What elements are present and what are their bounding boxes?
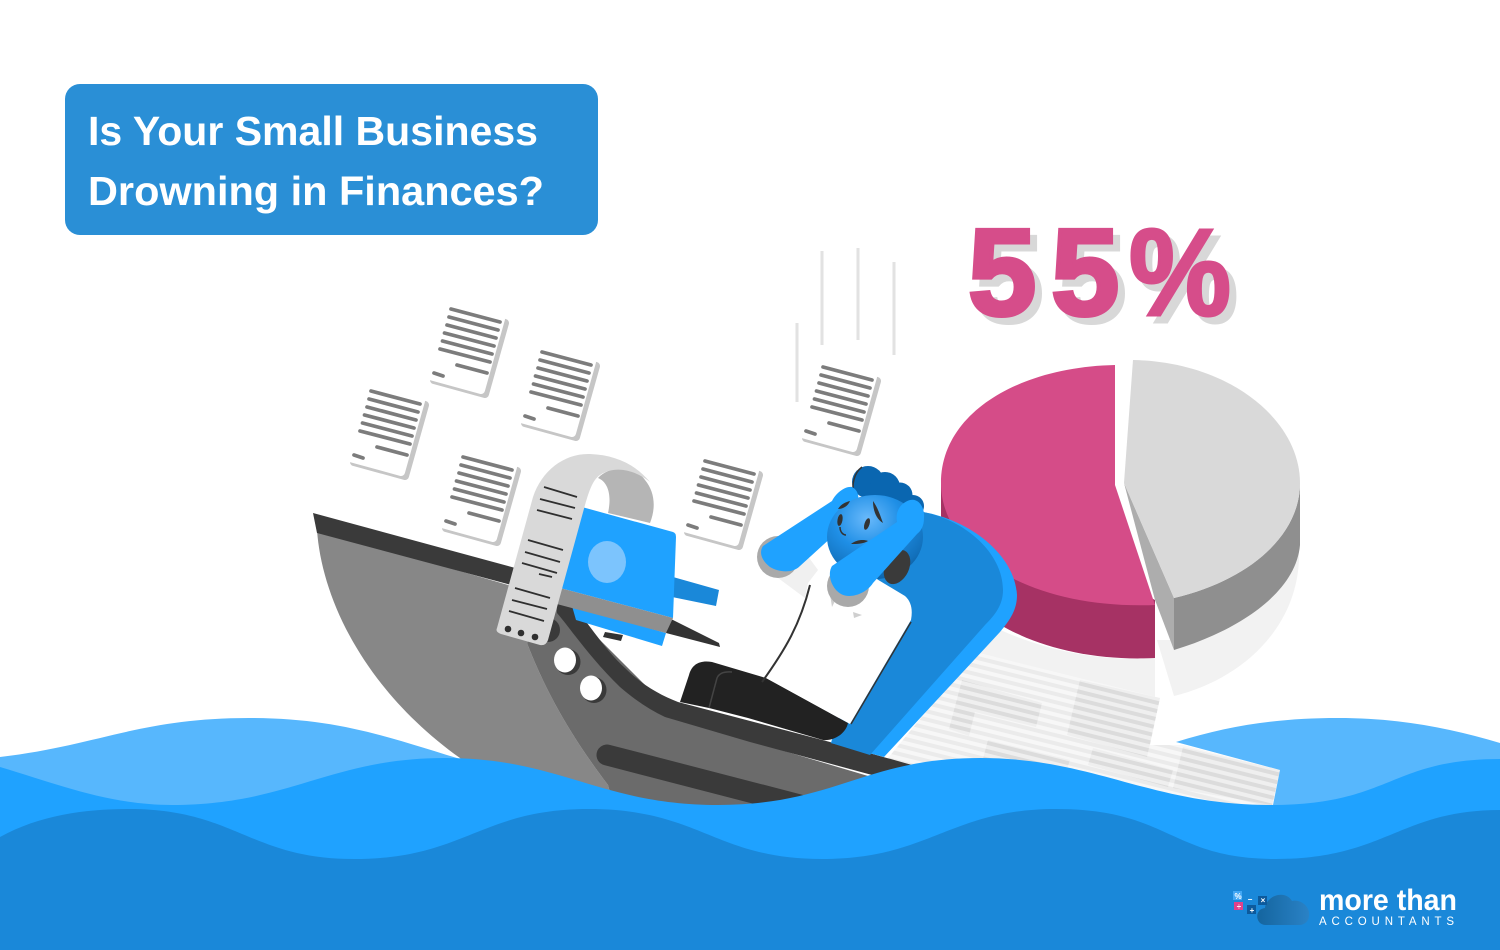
statistic: 55%: 55: [968, 205, 1119, 342]
laptop screen: [560, 507, 676, 618]
hull dark stripe: [607, 755, 800, 805]
pie chart 55 percent: [941, 360, 1300, 658]
receipt paper roll: [496, 454, 654, 645]
document 4: [442, 452, 517, 542]
scattered striped papers: [870, 652, 1280, 815]
statistic: 55%: [968, 205, 1238, 349]
pie shadow on the ground: [975, 540, 1299, 698]
logo: More Than Accountants: [1233, 884, 1457, 928]
laptop hinge bar: [672, 577, 719, 606]
document 5: [684, 456, 759, 546]
statistic: 55%: %: [1129, 205, 1231, 342]
title banner: Drowning in Finances?: [88, 168, 544, 214]
laptop wedge: [666, 618, 720, 647]
face: [836, 501, 883, 544]
hull light side: [317, 530, 620, 830]
laptop lower panel: [572, 606, 666, 646]
logo calculator keys: %: [1234, 892, 1242, 901]
falling motion lines: [797, 248, 894, 402]
title banner: [65, 84, 598, 235]
logo calculator keys: −: [1248, 895, 1253, 904]
statistic: 55%: 55: [975, 212, 1126, 349]
back wave left: [0, 718, 470, 810]
logo wordmark: more than: [1319, 884, 1457, 917]
document 2: [521, 347, 596, 437]
logo calculator keys: +: [1250, 906, 1255, 915]
shirt: [762, 555, 912, 724]
legs: [680, 662, 848, 740]
deck dark band: [557, 603, 912, 775]
hull middle section: [527, 600, 915, 830]
right arm: [827, 500, 924, 607]
hair: [852, 466, 924, 517]
back wave right: [1176, 718, 1500, 810]
front wave: [0, 809, 1500, 950]
chair: [831, 510, 1017, 757]
document 6 falling: [802, 362, 877, 452]
head: [827, 495, 923, 588]
receipt dots: [505, 626, 538, 640]
statistic: 55%: %: [1136, 212, 1238, 349]
sinking boat: [313, 513, 915, 830]
logo calculator keys: ×: [1261, 896, 1266, 905]
left arm: [757, 487, 858, 578]
laptop grey band: [553, 588, 673, 633]
logo calculator keys: ÷: [1237, 902, 1242, 911]
grey slice inner side: [1124, 483, 1174, 650]
logo calculator keys: [1233, 891, 1267, 915]
receipt front: [496, 454, 650, 645]
logo tagline: ACCOUNTANTS: [1319, 916, 1454, 928]
laptop: [553, 507, 720, 647]
document 3: [350, 386, 425, 476]
hull rim: [313, 513, 530, 590]
hull vents: [536, 618, 606, 703]
document 1: [430, 304, 505, 394]
receipt back curl: [598, 468, 654, 523]
title banner: Is Your Small Business: [88, 108, 538, 154]
grey slice outer side: [1174, 483, 1300, 650]
laptop logo: [588, 541, 626, 583]
logo cloud icon: [1257, 895, 1309, 925]
grey slice top: [1124, 360, 1300, 598]
pink slice top: [941, 365, 1155, 605]
businessman: [680, 466, 924, 740]
middle wave: [0, 758, 1500, 950]
pink slice side: [941, 483, 1155, 658]
receipt text lines: [509, 487, 577, 621]
